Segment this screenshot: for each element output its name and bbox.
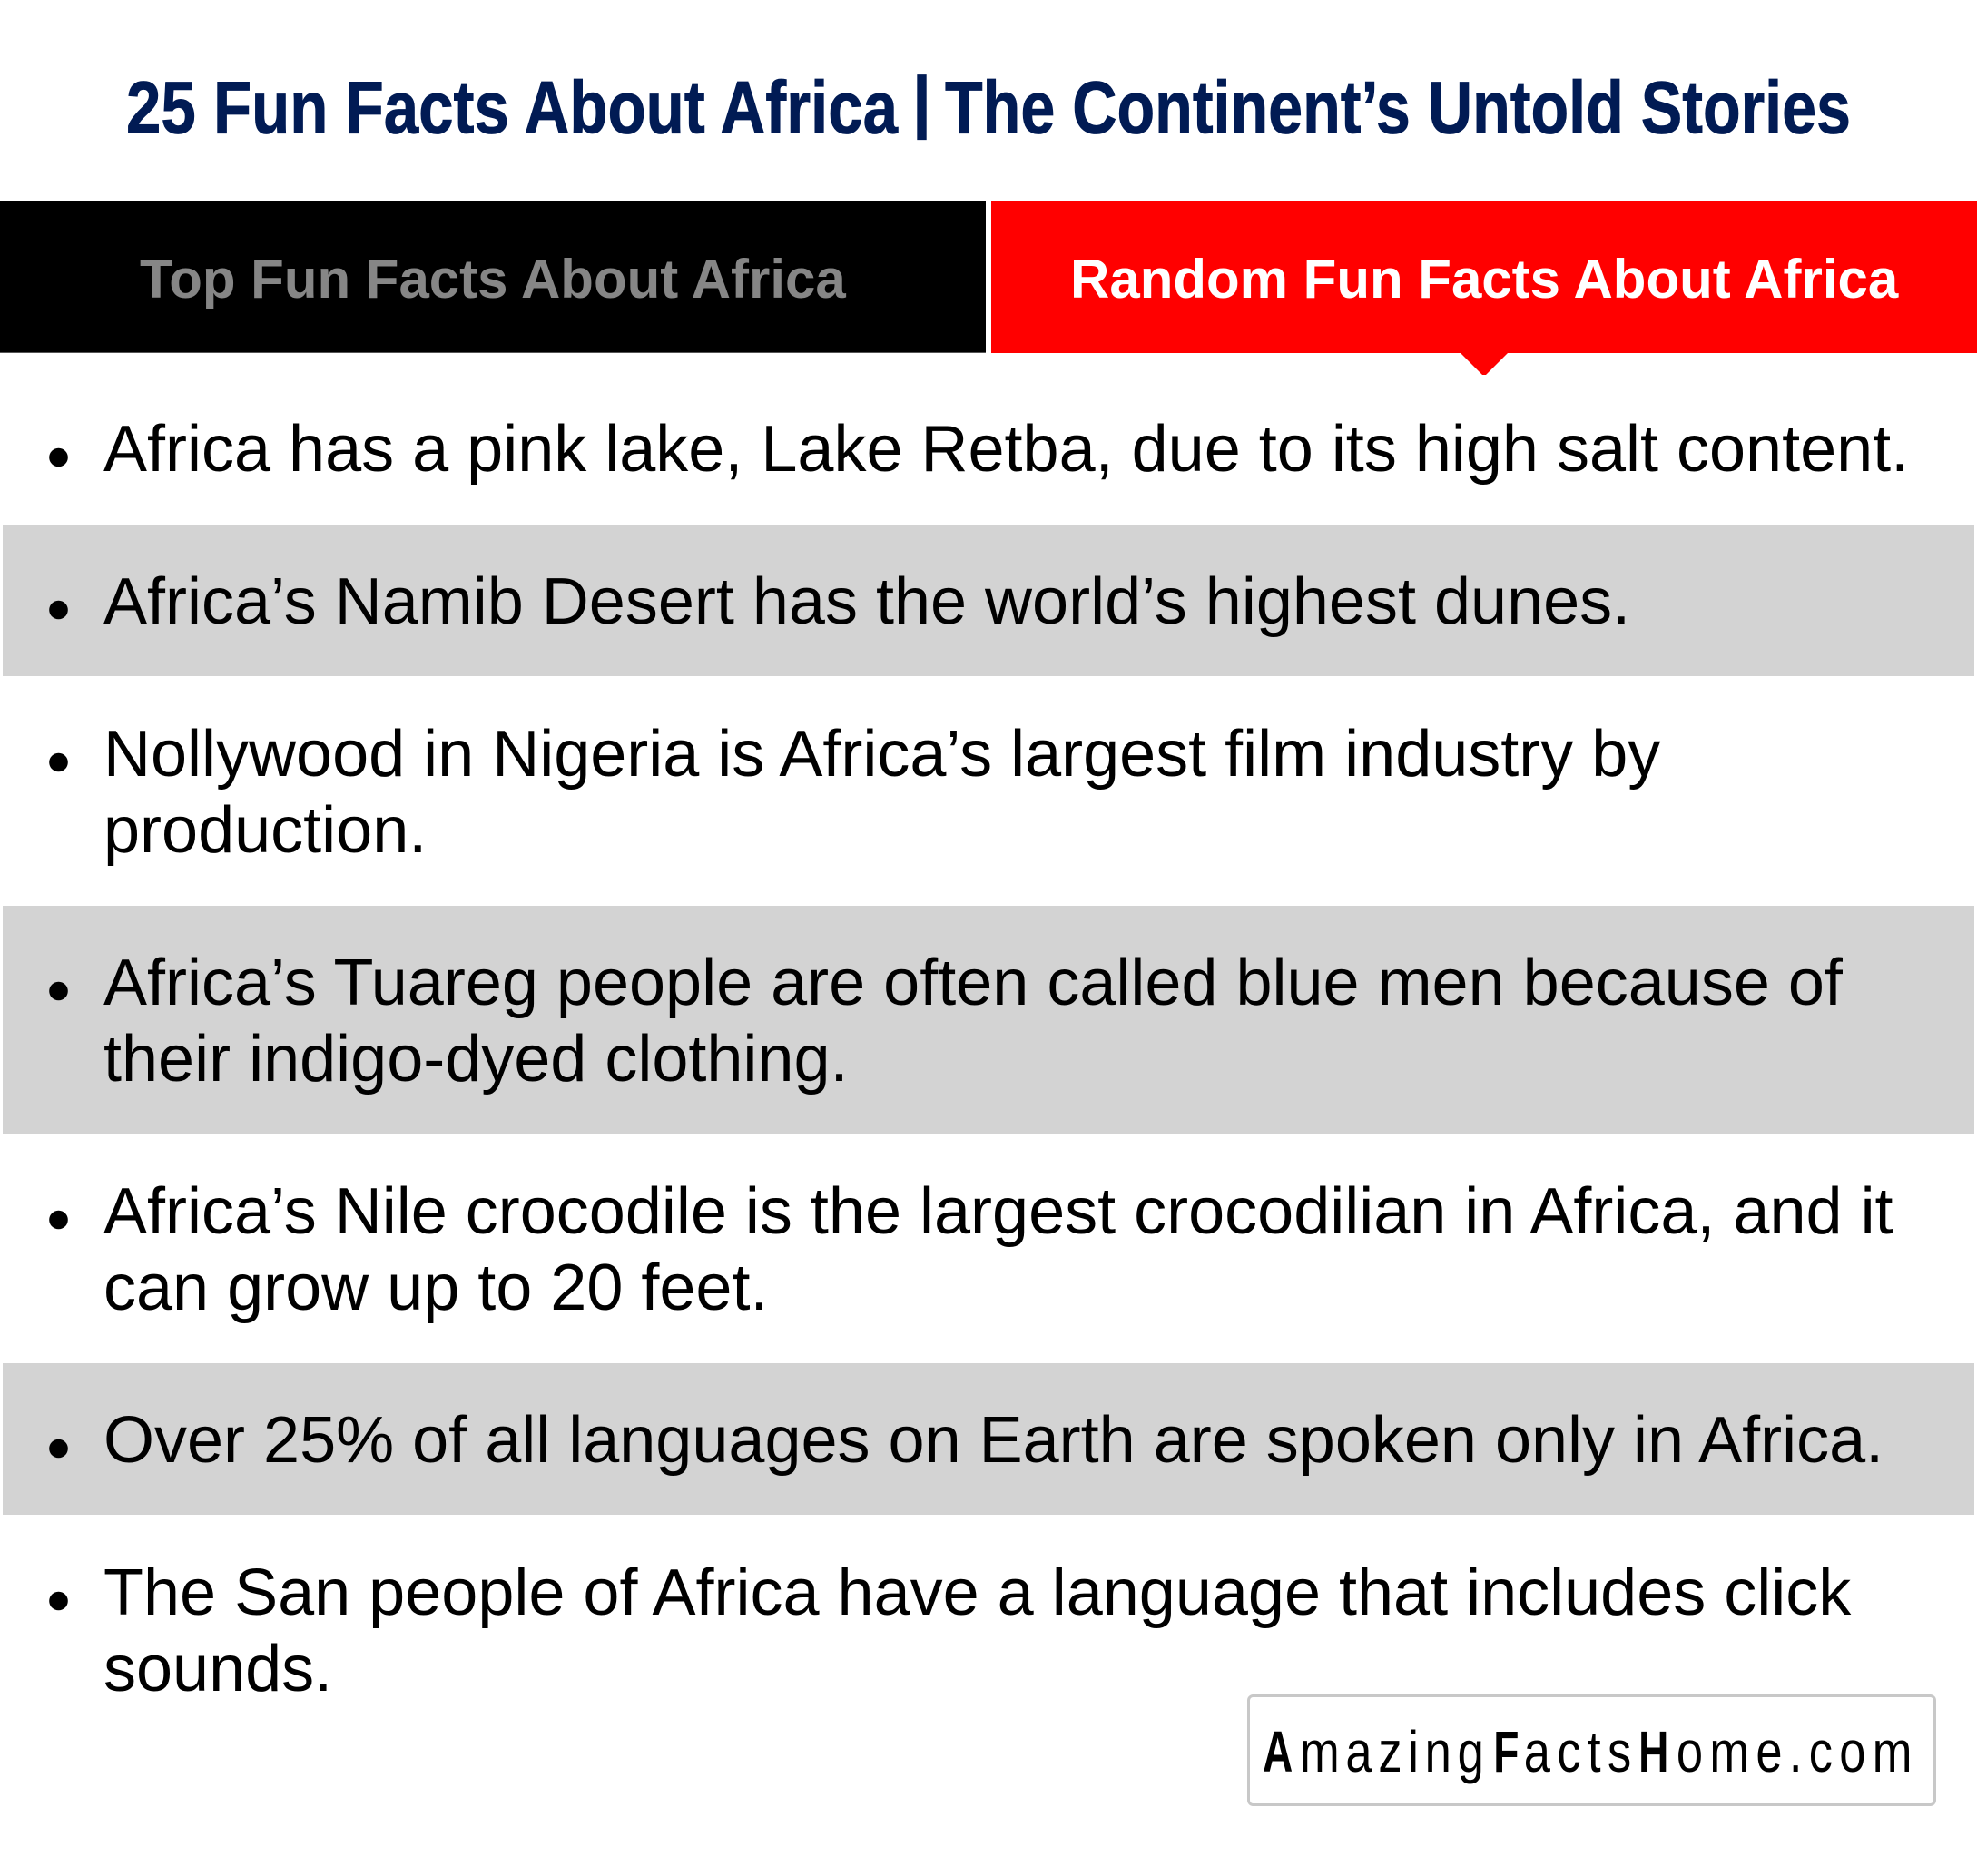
fact 3 — [49, 718, 1660, 867]
watermark: AmazingFactsHome.com: F — [1493, 1720, 1519, 1784]
fact 4 row: Africa’s Tuareg people are often called blue men because of — [103, 947, 1844, 1019]
tab: random fun facts (active): Random Fun Facts About Africa — [1070, 249, 1899, 309]
fact 6 row — [3, 1363, 1974, 1515]
fact 3: production. — [103, 794, 427, 867]
fact 7: The San people of Africa have a language that includes click — [103, 1557, 1852, 1629]
watermark: AmazingFactsHome.com: A — [1263, 1720, 1293, 1784]
watermark: AmazingFactsHome.com: mazing — [1300, 1720, 1490, 1784]
fact 5: Africa’s Nile crocodile is the largest crocodilian in Africa, and it — [103, 1175, 1893, 1248]
fact 2 row — [3, 525, 1974, 676]
fact 6 row: Over 25% of all languages on Earth are spoken only in Africa. — [103, 1404, 1884, 1477]
watermark: AmazingFactsHome.com: H — [1638, 1720, 1668, 1784]
fact 5: can grow up to 20 feet. — [103, 1252, 768, 1324]
fact 3: Nollywood in Nigeria is Africa’s largest film industry by — [103, 718, 1660, 791]
tab: random fun facts (active) — [991, 201, 1977, 375]
fact 4 row: their indigo-dyed clothing. — [103, 1023, 849, 1095]
watermark: AmazingFactsHome.com: ome.com — [1677, 1720, 1919, 1784]
fact 7 — [49, 1557, 1852, 1705]
watermark: AmazingFactsHome.com — [1249, 1695, 1935, 1804]
fact 2 row: Africa’s Namib Desert has the world’s highest dunes. — [103, 565, 1630, 638]
fact 1: Africa has a pink lake, Lake Retba, due to its high salt content. — [103, 413, 1909, 486]
tab: top fun facts: Top Fun Facts About Africa — [140, 249, 846, 309]
fact 4 row — [3, 906, 1974, 1134]
title: 25 Fun Facts About Africa — [126, 67, 899, 149]
fact 7: sounds. — [103, 1633, 332, 1705]
watermark: AmazingFactsHome.com: acts — [1524, 1720, 1638, 1784]
title: | — [912, 63, 931, 140]
tab: top fun facts — [0, 201, 986, 353]
fact 5 — [49, 1175, 1893, 1324]
